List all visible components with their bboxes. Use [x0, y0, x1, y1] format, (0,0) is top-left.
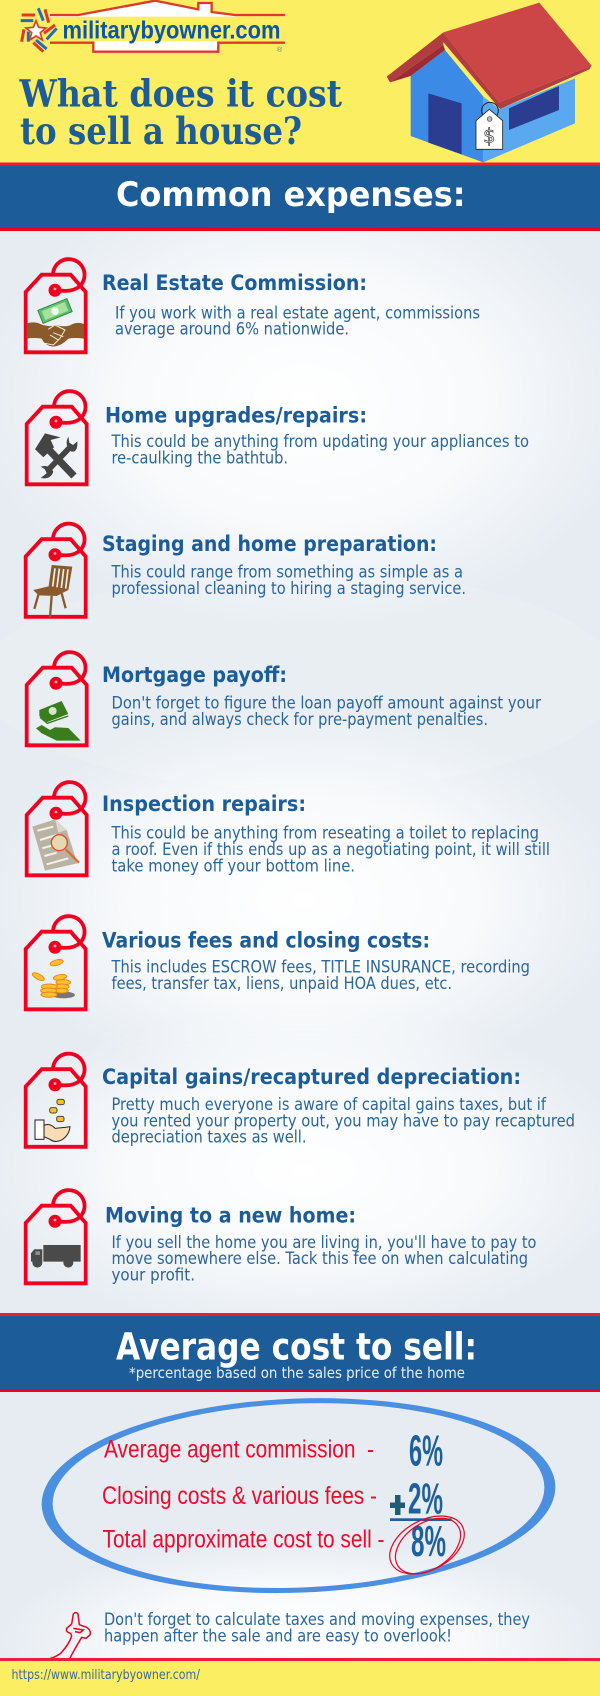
body text: professional cleaning to hiring a staging service. — [112, 578, 466, 598]
heading: Capital gains/recaptured depreciation: — [102, 1065, 521, 1090]
icon: tag with coins and hand — [26, 1054, 86, 1147]
oval outline — [38, 1389, 559, 1602]
body text — [111, 823, 550, 876]
row: agent commission: 6% — [409, 1427, 443, 1476]
panel: moving — [26, 1190, 536, 1285]
panel: inspection repairs — [27, 782, 550, 876]
banner: average cost to sell: Average cost to sell: — [116, 1325, 477, 1368]
panel: mortgage payoff — [27, 652, 541, 745]
title: What does it cost — [19, 72, 342, 116]
body text: move somewhere else. Tack this fee on when calculating — [112, 1248, 528, 1268]
body text: Don't forget to figure the loan payoff amount against your — [112, 693, 541, 713]
icon: tag with coins — [26, 916, 86, 1009]
banner: average cost to sell — [0, 1313, 600, 1392]
body text — [111, 431, 529, 467]
panel: fees and closing costs — [26, 916, 530, 1009]
icon: small price tag — [476, 102, 503, 149]
body text: depreciation taxes as well. — [112, 1127, 306, 1147]
heading: Real Estate Commission: — [102, 271, 367, 296]
note text: Don't forget to calculate taxes and moving expenses, they — [104, 1609, 530, 1629]
icon: tag with document and magnifier — [27, 782, 87, 875]
body text: This includes ESCROW fees, TITLE INSURANCE, recording — [111, 957, 530, 977]
cost table — [102, 1427, 474, 1586]
body text: your profit. — [112, 1265, 195, 1285]
sketched red circle — [380, 1504, 474, 1586]
banner: common expenses: Common expenses: — [116, 175, 466, 215]
title — [19, 72, 342, 153]
banner: average cost to sell: *percentage based on the sales price of the home — [129, 1364, 465, 1382]
note text: happen after the sale and are easy to overlook! — [104, 1626, 452, 1646]
body text: average around 6% nationwide. — [115, 319, 349, 339]
heading: Mortgage payoff: — [102, 663, 287, 688]
row: closing costs: 2% — [408, 1474, 443, 1523]
panel: real estate commission — [26, 259, 480, 352]
body text: re-caulking the bathtub. — [112, 447, 288, 467]
icon: house with price tag — [387, 3, 592, 162]
body text — [112, 1094, 575, 1147]
row: closing costs — [102, 1474, 452, 1523]
icon: tag with truck — [26, 1190, 86, 1283]
row: agent commission — [104, 1427, 443, 1476]
body text: gains, and always check for pre-payment penalties. — [112, 709, 488, 729]
heading: Home upgrades/repairs: — [105, 404, 367, 429]
body text: This could range from something as simple as a — [111, 561, 463, 581]
icon: tag with chair — [26, 524, 86, 617]
panel: home upgrades — [27, 391, 529, 484]
logo: militarybyowner.com — [62, 16, 280, 44]
icon: small price tag: $ — [483, 125, 495, 148]
icon: tag with handshake and money — [26, 259, 86, 352]
header panel — [0, 0, 600, 163]
heading: Inspection repairs: — [102, 792, 306, 817]
panel: capital gains — [26, 1054, 575, 1147]
body text: This could be anything from reseating a toilet to replacing — [111, 823, 539, 843]
row: total — [102, 1504, 474, 1586]
body text — [111, 561, 466, 598]
body text: take money off your bottom line. — [112, 856, 355, 876]
body text: Pretty much everyone is aware of capital gains taxes, but if — [112, 1094, 547, 1114]
icon: tag with money and hand — [27, 652, 87, 745]
panel: staging — [26, 524, 466, 617]
body text: If you work with a real estate agent, commissions — [115, 302, 480, 322]
body text: fees, transfer tax, liens, unpaid HOA dues, etc. — [112, 973, 452, 993]
footer: https://www.militarybyowner.com/ — [12, 1668, 201, 1683]
body text: If you sell the home you are living in, you'll have to pay to — [112, 1232, 536, 1252]
heading: Moving to a new home: — [105, 1204, 356, 1229]
row: total: Total approximate cost to sell - — [102, 1525, 384, 1553]
note text — [104, 1609, 530, 1646]
body text — [112, 1232, 536, 1285]
banner: common expenses — [0, 162, 600, 231]
icon: pointing hand — [47, 1613, 90, 1659]
icon: tag with tools — [27, 391, 87, 484]
logo: ® — [277, 46, 283, 54]
body text — [111, 957, 530, 993]
row: total: 8% — [411, 1517, 446, 1566]
body text — [115, 302, 480, 339]
heading: Staging and home preparation: — [102, 532, 437, 557]
body text: This could be anything from updating your appliances to — [111, 431, 529, 451]
body text — [112, 693, 541, 729]
body text: a roof. Even if this ends up as a negotiating point, it will still — [112, 839, 550, 859]
footer — [0, 1658, 600, 1696]
heading: Various fees and closing costs: — [102, 929, 430, 954]
title: to sell a house? — [20, 109, 302, 153]
row: agent commission: Average agent commission - — [104, 1435, 374, 1463]
row: closing costs: Closing costs & various fees - — [102, 1482, 377, 1510]
logo — [21, 1, 285, 54]
